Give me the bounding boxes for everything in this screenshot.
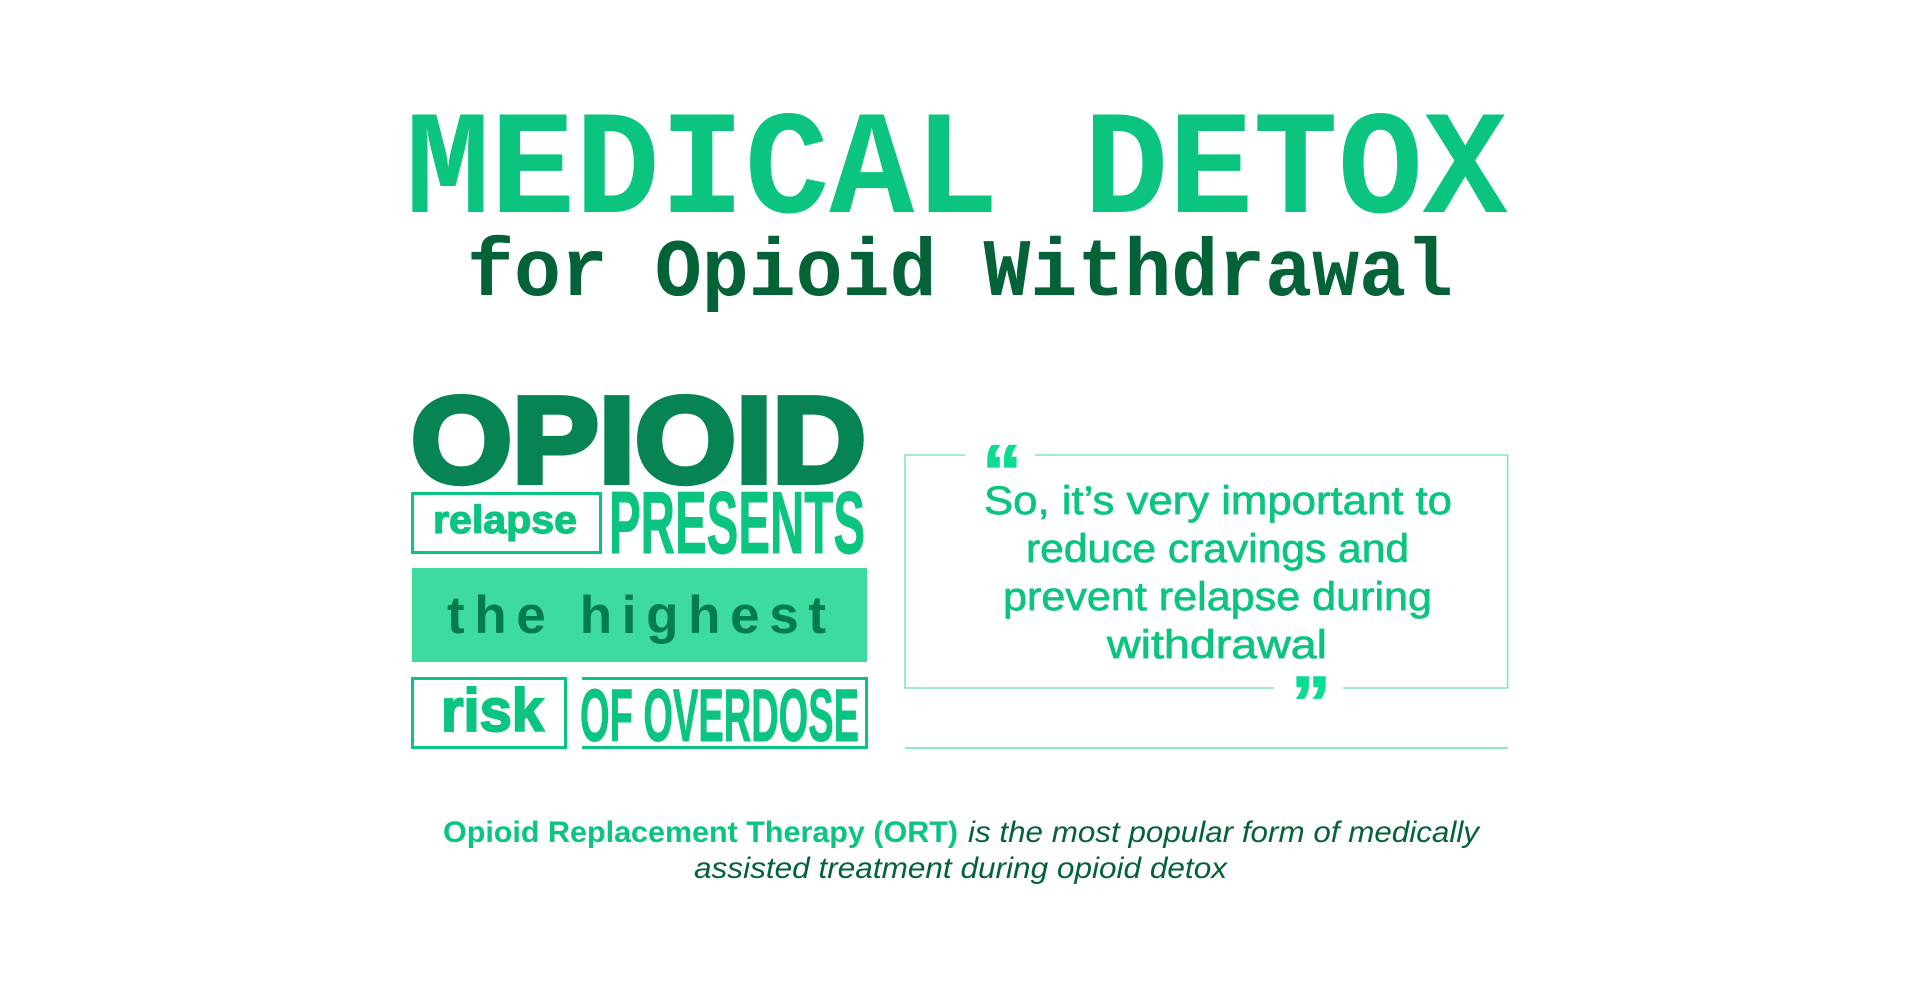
title: MEDICAL DETOX bbox=[406, 90, 1508, 257]
panel: quote bbox=[905, 430, 1508, 746]
banner: the highest bbox=[412, 568, 867, 662]
icon: closing quotation mark: ” bbox=[1291, 661, 1331, 746]
word: OPIOID: OPIOID bbox=[411, 372, 866, 508]
subtitle: for Opioid Withdrawal bbox=[467, 227, 1453, 320]
word: PRESENTS: PRESENTS bbox=[609, 473, 865, 572]
boxed word: risk: risk bbox=[441, 677, 545, 744]
quote text: prevent relapse during bbox=[1003, 575, 1432, 619]
footer note: is the most popular form of medically bbox=[968, 816, 1481, 849]
quote text: reduce cravings and bbox=[1026, 527, 1409, 571]
divider line bbox=[905, 747, 1508, 749]
quote text: So, it’s very important to bbox=[984, 479, 1452, 523]
boxed phrase: of overdose: OF OVERDOSE bbox=[580, 674, 859, 757]
icon: opening quotation mark: “ bbox=[982, 430, 1022, 515]
quote text bbox=[984, 479, 1452, 667]
banner: the highest: the highest bbox=[447, 586, 826, 645]
boxed word: relapse bbox=[412, 494, 600, 552]
boxed word: relapse: relapse bbox=[433, 499, 577, 542]
quote frame bbox=[905, 455, 1508, 688]
quote text: withdrawal bbox=[1106, 623, 1327, 667]
footer note bbox=[443, 816, 1481, 885]
panel: opioid typographic statement bbox=[411, 372, 867, 757]
boxed word: risk bbox=[412, 677, 566, 748]
footer note: assisted treatment during opioid detox bbox=[694, 852, 1228, 885]
boxed phrase: of overdose bbox=[580, 674, 866, 757]
footer note: Opioid Replacement Therapy (ORT) bbox=[443, 816, 958, 849]
